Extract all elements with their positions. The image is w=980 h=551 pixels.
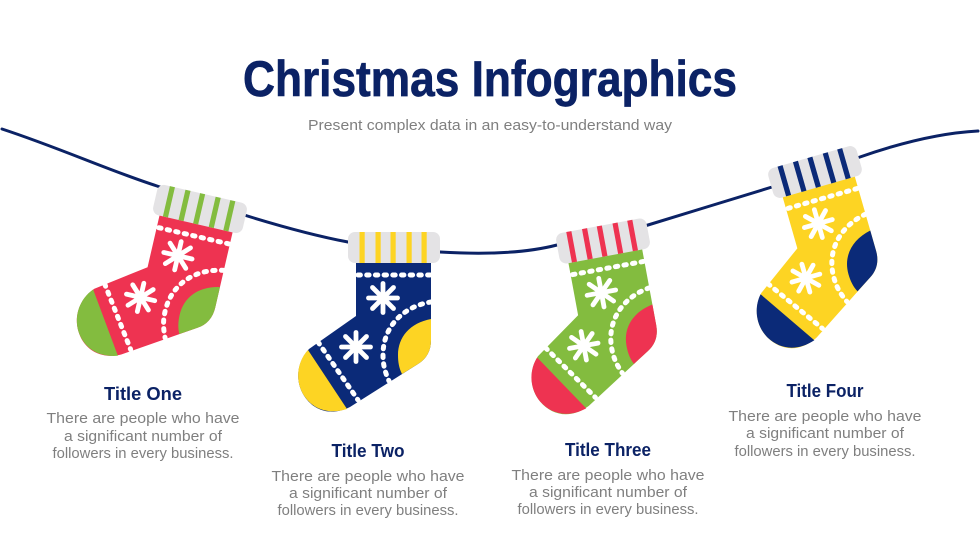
text block: title two: There are people who have (272, 468, 464, 485)
text block: title four: Title Four (786, 381, 864, 401)
text block: title three (512, 440, 704, 518)
sock four: yellow with navy trim (719, 144, 904, 356)
sock two: navy with yellow trim (298, 232, 440, 412)
text block: title four: There are people who have (728, 408, 922, 425)
text block: title four: a significant number of (746, 425, 905, 442)
text block: title three: There are people who have (512, 467, 704, 484)
text block: title three: Title Three (565, 440, 651, 460)
text block: title three: a significant number of (529, 484, 688, 501)
text block: title two: Title Two (332, 441, 404, 461)
text block: title four: followers in every business. (734, 443, 916, 460)
text block: title three: followers in every business. (518, 501, 698, 518)
text block: title one (46, 384, 240, 462)
text block: title four (728, 381, 922, 460)
sock one: red with green trim (70, 172, 248, 379)
text block: title one: There are people who have (46, 410, 240, 427)
text block: title two: a significant number of (289, 485, 448, 502)
text block: title two (272, 441, 464, 519)
text block: title two: followers in every business. (278, 502, 458, 519)
text block: title one: Title One (104, 384, 182, 404)
garland string (2, 129, 978, 253)
sock three: green with red trim (506, 217, 678, 420)
text block: title one: a significant number of (64, 428, 223, 445)
title: Christmas Infographics (243, 51, 737, 107)
subtitle: Present complex data in an easy-to-understand way (308, 117, 673, 134)
text block: title one: followers in every business. (52, 445, 234, 462)
